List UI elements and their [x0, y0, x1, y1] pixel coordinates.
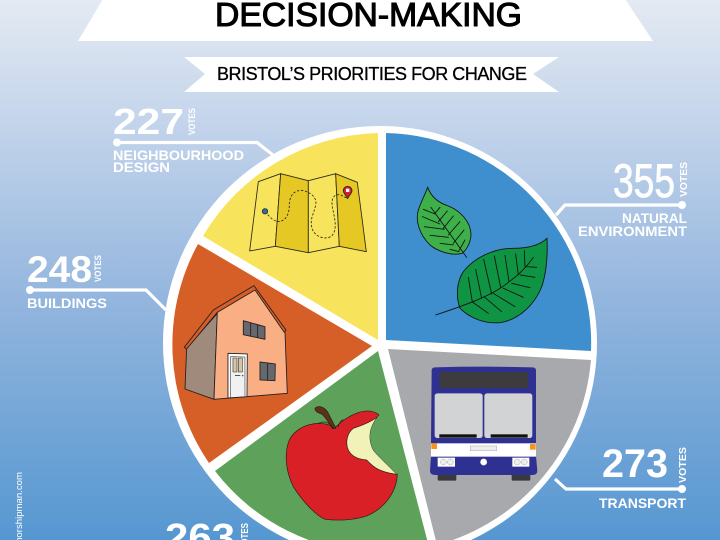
label: natural environment: 355	[613, 154, 675, 207]
label: natural environment: NATURAL	[622, 210, 687, 226]
label: transport: VOTES	[678, 447, 689, 483]
label: buildings: VOTES	[93, 255, 103, 282]
label: buildings: 248	[27, 249, 92, 290]
wedge: neighbourhood design	[203, 133, 378, 340]
label: natural environment	[556, 154, 690, 239]
label: buildings	[26, 249, 166, 311]
icon: map	[250, 174, 366, 253]
label: natural environment: ENVIRONMENT	[578, 223, 687, 239]
icon: house	[184, 286, 287, 399]
pie chart	[163, 126, 597, 540]
window lower	[260, 362, 275, 381]
wedge: food	[215, 351, 429, 540]
title banner	[78, 0, 653, 41]
door	[228, 353, 247, 398]
icon: map pin	[343, 186, 352, 199]
label: neighbourhood design: NEIGHBOURHOOD	[113, 147, 244, 163]
wedge: buildings	[172, 244, 372, 463]
icon: leaves	[417, 187, 547, 323]
icon: apple	[286, 407, 405, 520]
wedge: transport	[388, 349, 591, 540]
label: buildings: BUILDINGS	[27, 295, 107, 311]
label: neighbourhood design: DESIGN	[113, 159, 170, 175]
label: transport: 273	[602, 442, 668, 486]
label: transport	[555, 442, 689, 511]
label: neighbourhood design	[113, 101, 273, 175]
wedge: natural environment	[386, 133, 591, 351]
window upper	[243, 321, 265, 339]
subtitle ribbon	[184, 57, 559, 92]
subtitle: BRISTOL’S PRIORITIES FOR CHANGE	[217, 64, 527, 84]
label: neighbourhood design: VOTES	[187, 108, 197, 135]
label: neighbourhood design: 227	[113, 101, 184, 142]
label: natural environment: VOTES	[679, 162, 690, 197]
label: transport: TRANSPORT	[599, 495, 686, 511]
icon: bus	[430, 367, 537, 481]
